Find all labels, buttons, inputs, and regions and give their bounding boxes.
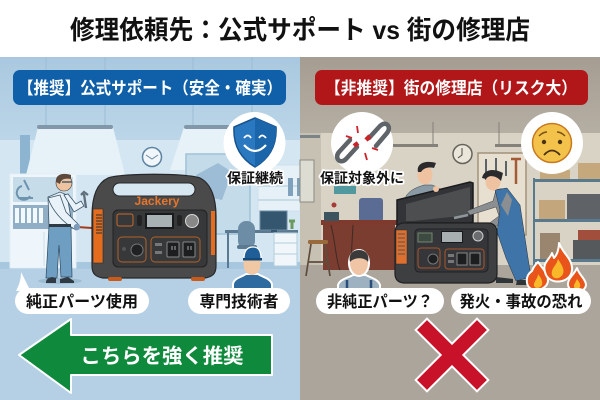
callout: genuine parts [15,272,149,314]
desk with monitor and chair [225,211,298,268]
callout: non-genuine parts [316,288,444,314]
header: recommended [13,70,286,105]
callout: specialist technician: 専門技術者 [200,292,278,311]
panel: official support [0,57,300,400]
opened lid [397,182,473,228]
right shelves [258,165,300,211]
label: warranty void: 保証対象外に [320,170,404,186]
callout: fire risk [451,288,591,314]
workbench and chair [321,198,397,270]
brand label: Jackery [134,196,180,208]
technician with tools [38,174,92,284]
repair person behind [405,162,446,206]
label: warranty continues: 保証継続 [227,170,283,186]
callout: genuine parts: 純正パーツ使用 [26,293,138,311]
header: not recommended [315,70,588,105]
poster [334,186,356,194]
wall board [186,154,250,234]
icon: fire [527,243,586,292]
wall clock [453,144,472,164]
header: recommended: 【推奨】公式サポート（安全・確実） [18,78,282,98]
callout: specialist technician [188,288,290,314]
arrow: strongly recommended: こちらを強く推奨 [80,345,244,368]
header: not recommended: 【非推奨】街の修理店（リスク大） [325,79,577,98]
icon: shield warranty [224,112,286,174]
icon: expert technician [233,247,272,289]
callout: fire risk: 発火・事故の恐れ [460,292,582,311]
wall clock [142,148,162,166]
icon: broken chain [331,112,393,174]
arrow: strongly recommended [19,319,272,393]
icon: worried face [521,112,583,174]
icon: cross mark [427,330,477,380]
shelf unit [10,174,76,268]
title: 修理依頼先：公式サポート vs 街の修理店 [70,15,530,45]
panel: local repair shop [300,57,600,400]
callout: non-genuine parts: 非純正パーツ？ [327,293,433,311]
icon: unknown repair person [338,250,380,289]
repair person front [454,170,531,285]
tool board [478,153,526,235]
metal shelving [533,163,600,278]
portable power station: exposed [395,223,497,283]
stool [306,240,330,276]
portable power station: Jackery left [92,174,216,281]
